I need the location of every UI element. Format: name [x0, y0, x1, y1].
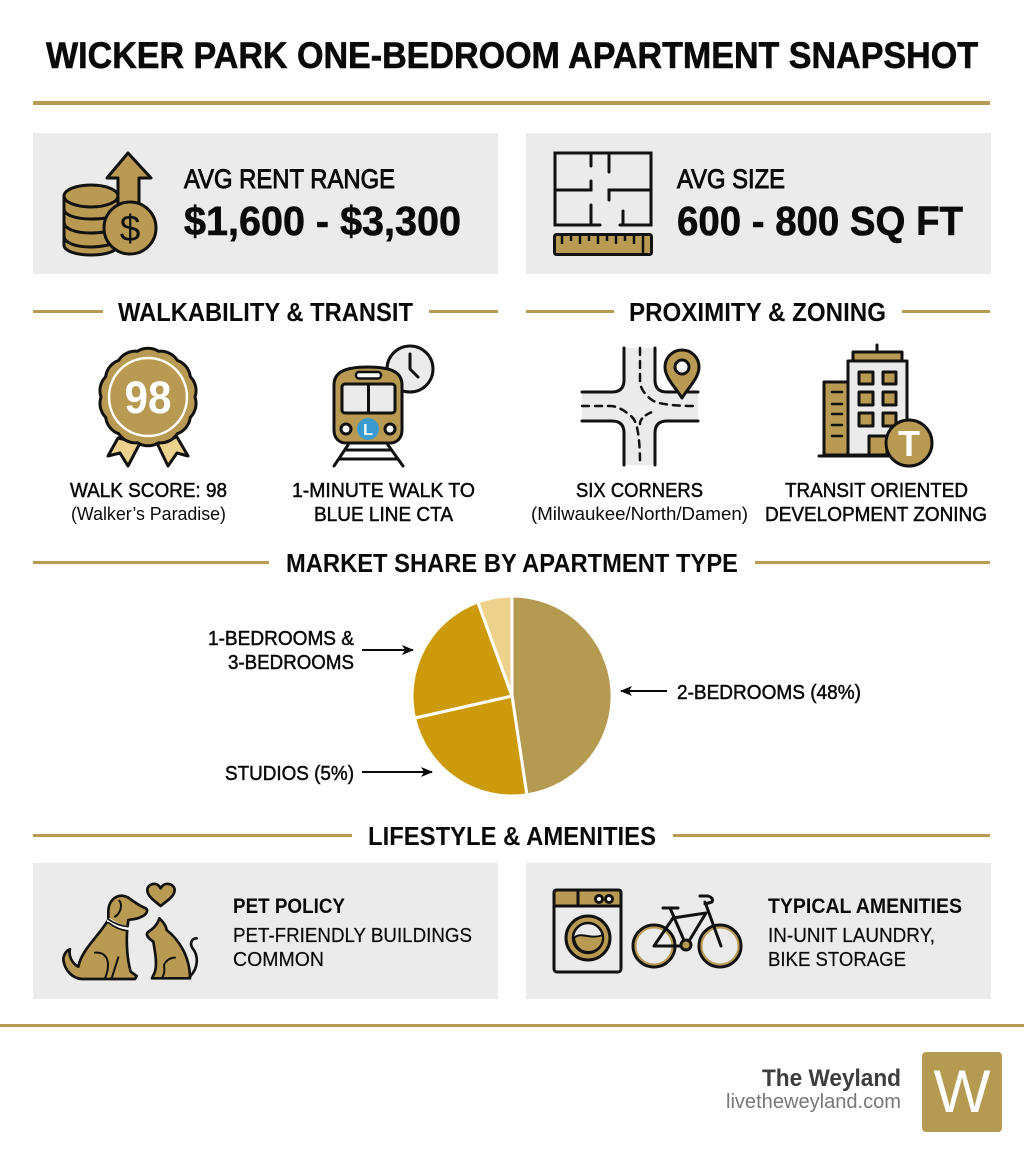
text: in-unit laundry: IN-UNIT LAUNDRY,	[768, 924, 935, 947]
label: avg rent range: AVG RENT RANGE	[184, 164, 395, 194]
label: walker's paradise: (Walker’s Paradise)	[71, 504, 226, 524]
icon: coins with up arrow	[64, 153, 156, 255]
panel: pet policy	[33, 863, 498, 999]
panel: average rent range	[33, 133, 498, 274]
label: walk to blue line: 1-MINUTE WALK TO	[292, 479, 475, 502]
text: common: COMMON	[233, 948, 324, 971]
callout: 1-bedrooms and 3-bedrooms	[208, 627, 413, 674]
icon: washing machine	[554, 890, 621, 972]
icon: buildings with T badge	[819, 345, 932, 466]
heading: lifestyle and amenities: LIFESTYLE & AMENITIES	[368, 821, 656, 851]
label: avg size: AVG SIZE	[677, 164, 785, 194]
value: size: 600 - 800 SQ FT	[677, 198, 963, 244]
heading: proximity and zoning: PROXIMITY & ZONING	[629, 297, 886, 327]
website: livetheweyland.com	[726, 1091, 901, 1113]
item: walk score	[70, 348, 227, 524]
panel: typical amenities	[526, 863, 991, 999]
icon: coins with up arrow: $	[120, 208, 140, 249]
icon: dog, cat and heart	[63, 884, 197, 979]
slice: 1-bedrooms and 3-bedrooms	[412, 602, 512, 718]
footer	[0, 1024, 1024, 1132]
text: bike storage: BIKE STORAGE	[768, 948, 906, 971]
slice: studios	[414, 696, 527, 796]
heading: walkability and transit	[33, 297, 498, 327]
heading: proximity and zoning	[526, 297, 990, 327]
icon: walk score badge	[100, 348, 196, 466]
icon: intersection with map pin	[582, 348, 699, 465]
panel: average size	[526, 133, 991, 274]
label: transit oriented: TRANSIT ORIENTED	[785, 479, 968, 502]
icon: train with clock: L	[363, 422, 373, 439]
item: transit oriented zoning	[765, 345, 987, 526]
logo	[922, 1052, 1002, 1132]
text: pet-friendly buildings: PET-FRIENDLY BUILDINGS	[233, 924, 472, 947]
logo: W	[934, 1058, 991, 1125]
heading: market share	[33, 548, 990, 578]
icon: train with clock	[334, 346, 433, 466]
label: development zoning: DEVELOPMENT ZONING	[765, 503, 987, 526]
label: pet policy: PET POLICY	[233, 895, 345, 918]
item: blue line	[292, 346, 475, 526]
icon: bicycle	[633, 896, 741, 967]
heading: lifestyle and amenities	[33, 821, 990, 851]
heading: walkability and transit: WALKABILITY & TRANSIT	[118, 297, 413, 327]
label: blue line cta: BLUE LINE CTA	[314, 503, 453, 526]
callout: 1-bedrooms and 3-bedrooms: 1-BEDROOMS &	[208, 627, 354, 650]
slice: remainder	[478, 596, 512, 696]
icon: walk score badge: 98	[124, 372, 172, 423]
value: rent range: $1,600 - $3,300	[184, 198, 461, 244]
label: streets: (Milwaukee/North/Damen)	[531, 504, 748, 524]
callout: studios: STUDIOS (5%)	[225, 762, 354, 785]
slice: 2-bedrooms	[512, 596, 612, 795]
pie chart: market share	[412, 596, 612, 796]
heading: market share: MARKET SHARE BY APARTMENT TYPE	[286, 548, 738, 578]
callout: 1-bedrooms and 3-bedrooms: 3-BEDROOMS	[228, 651, 354, 674]
label: typical amenities: TYPICAL AMENITIES	[768, 895, 962, 918]
label: six corners: SIX CORNERS	[576, 479, 703, 502]
callout: 2-bedrooms: 2-BEDROOMS (48%)	[677, 681, 861, 704]
brand name: The Weyland	[762, 1065, 901, 1092]
icon: floor plan with ruler	[554, 153, 652, 254]
item: six corners	[531, 348, 748, 524]
icon: buildings with T badge: T	[898, 423, 920, 464]
label: walk score: WALK SCORE: 98	[70, 479, 227, 502]
